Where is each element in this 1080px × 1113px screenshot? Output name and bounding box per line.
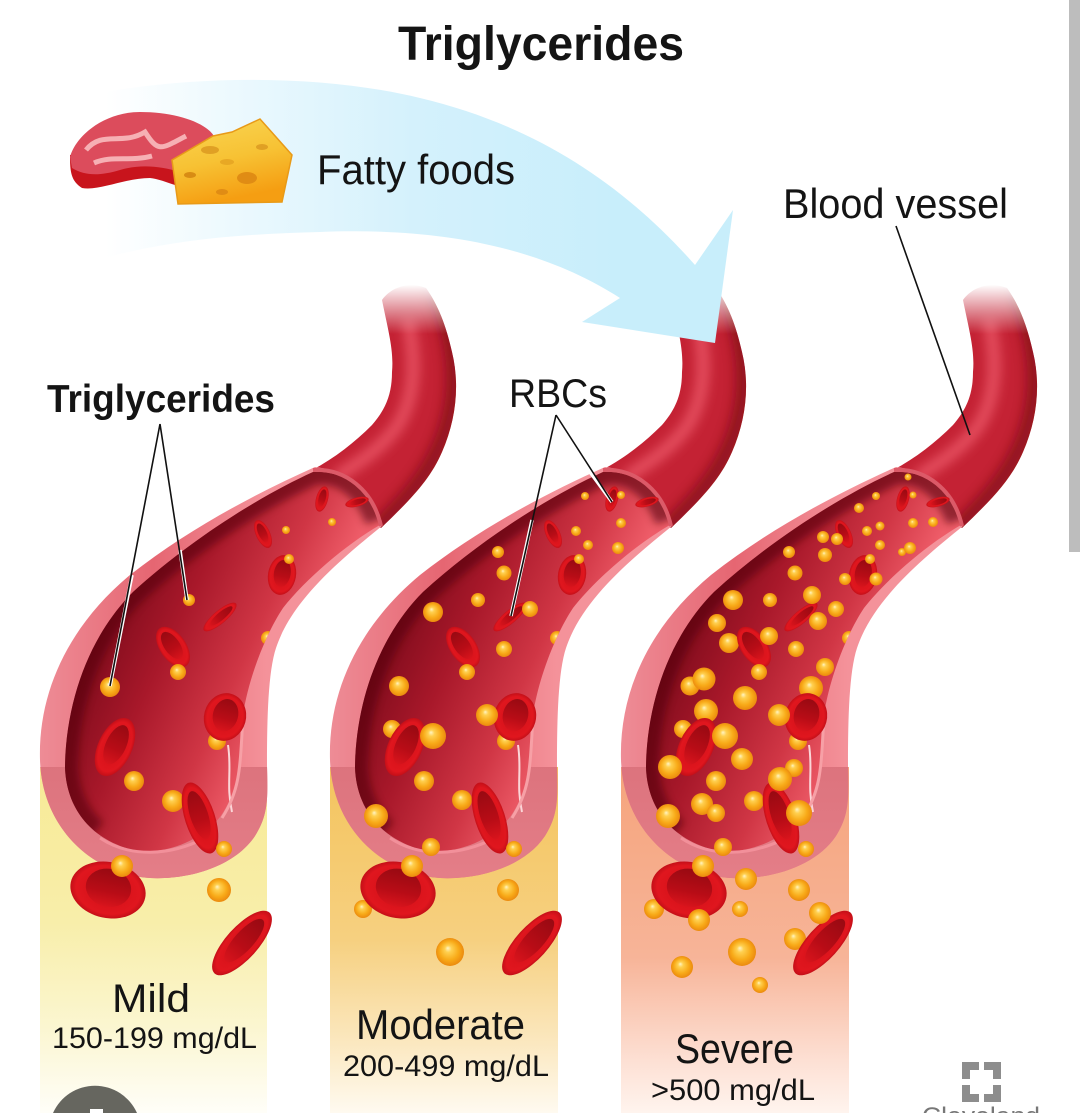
icon: cheese wedge [172,119,292,204]
label: RBCs: RBCs [509,372,607,416]
vessel: moderate [330,270,760,984]
leader line: blood vessel [896,226,970,435]
red blood cells: mild [65,485,370,984]
label: moderate [343,1001,549,1083]
leader lines: triglycerides [110,424,187,686]
label: mild: Mild [112,977,190,1021]
panel: mild background column [40,767,267,1113]
icon: meat steak [70,112,215,188]
label: mild: 150-199 mg/dL [52,1022,257,1055]
red blood cells: severe [646,485,951,984]
leader lines: RBCs [511,415,612,616]
vessel: mild [40,270,470,984]
label: severe: >500 mg/dL [651,1074,815,1107]
label: blood vessel: Blood vessel [783,180,1008,227]
triglyceride droplets: severe [656,474,938,993]
triglyceride droplets behind cells: mild [162,631,275,812]
panel: severe background column [621,767,849,1113]
red blood cells: moderate [355,485,660,984]
triglyceride droplets: moderate [364,491,626,966]
triglyceride droplets: mild [100,518,336,902]
label: triglycerides: Triglycerides [47,378,275,421]
label: moderate: Moderate [356,1001,525,1048]
triglyceride droplets behind cells: moderate [354,631,564,918]
panel: moderate background column [330,767,558,1113]
label: mild [52,977,257,1055]
title: Triglycerides [398,18,684,71]
triglyceride droplets behind cells: severe [644,631,856,950]
side scrollbar strip [1069,0,1080,552]
vessel: severe [621,270,1051,993]
label: fatty foods: Fatty foods [317,146,515,193]
label: severe [651,1025,815,1107]
icon: play button circle [53,1086,137,1113]
logo: Cleveland Clinic [922,1062,1040,1113]
label: moderate: 200-499 mg/dL [343,1050,549,1083]
label: severe: Severe [675,1025,794,1072]
arrow: fatty foods into blood vessel [105,80,733,343]
